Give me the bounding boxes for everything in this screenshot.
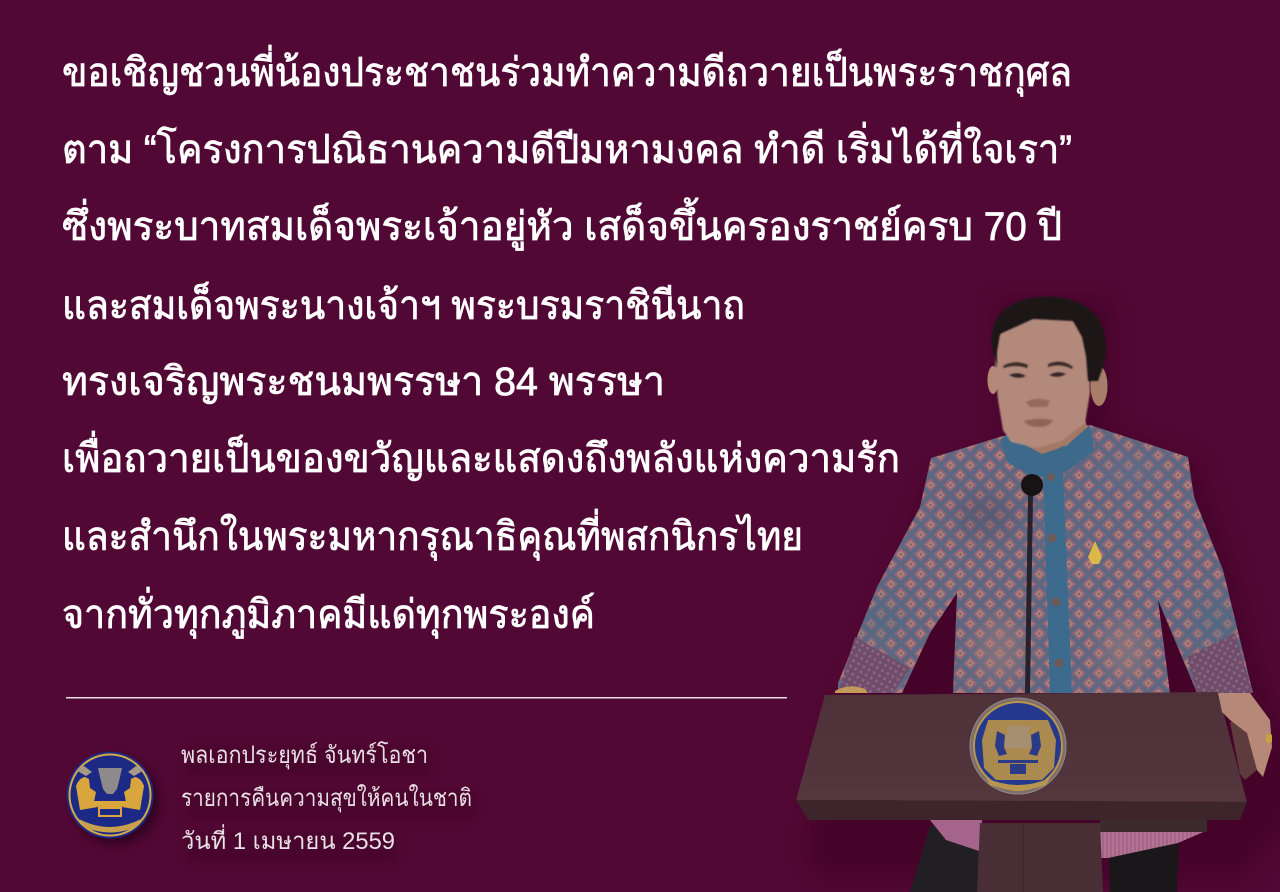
divider line (66, 697, 787, 698)
buttons (1047, 473, 1064, 668)
podium front edge (796, 800, 1247, 820)
eyes (1009, 372, 1066, 378)
jacket (838, 425, 1253, 693)
right cuff (1187, 633, 1253, 693)
podium seal (970, 698, 1066, 794)
brows (1003, 362, 1073, 369)
line 4: และสมเด็จพระนางเจ้าฯ พระบรมราชินีนาถ (62, 281, 745, 328)
watch band (835, 686, 868, 693)
facial features (1003, 362, 1073, 427)
button 4 (1054, 658, 1064, 668)
footer text shadow (186, 746, 476, 862)
date: วันที่ 1 เมษายน 2559 (181, 824, 395, 855)
line 1: ขอเชิญชวนพี่น้องประชาชนร่วมทำความดีถวายเป็นพระราชกุศล (62, 45, 1072, 97)
line 5: ทรงเจริญพระชนมพรรษา 84 พรรษา (62, 360, 665, 404)
programme name: รายการคืนความสุขให้คนในชาติ (181, 784, 472, 813)
mouth (1024, 419, 1053, 427)
placket (1043, 472, 1072, 693)
lectern box at right hand (1230, 720, 1259, 780)
jacket shading (854, 454, 1235, 680)
stem seam (1023, 823, 1024, 892)
podium stem (977, 823, 1103, 892)
nose (1026, 399, 1050, 407)
button 1 (1047, 473, 1055, 481)
neck (1015, 420, 1089, 456)
right hand (1218, 693, 1272, 777)
line 8: จากทั่วทุกภูมิภาคมีแด่ทุกพระองค์ (62, 587, 595, 639)
line 3: ซึ่งพระบาทสมเด็จพระเจ้าอยู่หัว เสด็จขึ้นครองราชย์ครบ 70 ปี (62, 197, 1062, 250)
lapel pin (1088, 541, 1102, 564)
shirt hem (930, 820, 1208, 858)
left cuff (838, 637, 910, 693)
ears (988, 366, 1108, 406)
line 2: ตาม “โครงการปณิธานความดีปีมหามงคล ทำดี เริ่มได้ที่ใจเรา” (62, 122, 1072, 172)
figure shadow (805, 300, 1280, 880)
footer credits text (181, 741, 476, 862)
speaker at podium (796, 297, 1280, 892)
speaker name: พลเอกประยุทธ์ จันทร์โอชา (181, 741, 428, 770)
podium slanted top (796, 692, 1247, 802)
trousers (910, 826, 1179, 892)
line 7: และสำนึกในพระมหากรุณาธิคุณที่พสกนิกรไทย (62, 509, 803, 561)
collar (1000, 425, 1094, 477)
hair (991, 297, 1106, 381)
main message text (62, 45, 1072, 639)
microphone (1021, 474, 1043, 693)
button 3 (1052, 598, 1060, 606)
line 6: เพื่อถวายเป็นของขวัญและแสดงถึงพลังแห่งความรัก (62, 431, 900, 481)
podium (796, 692, 1247, 892)
ring (1266, 734, 1272, 743)
government emblem (66, 752, 159, 844)
face (995, 314, 1090, 448)
button 2 (1048, 534, 1056, 542)
